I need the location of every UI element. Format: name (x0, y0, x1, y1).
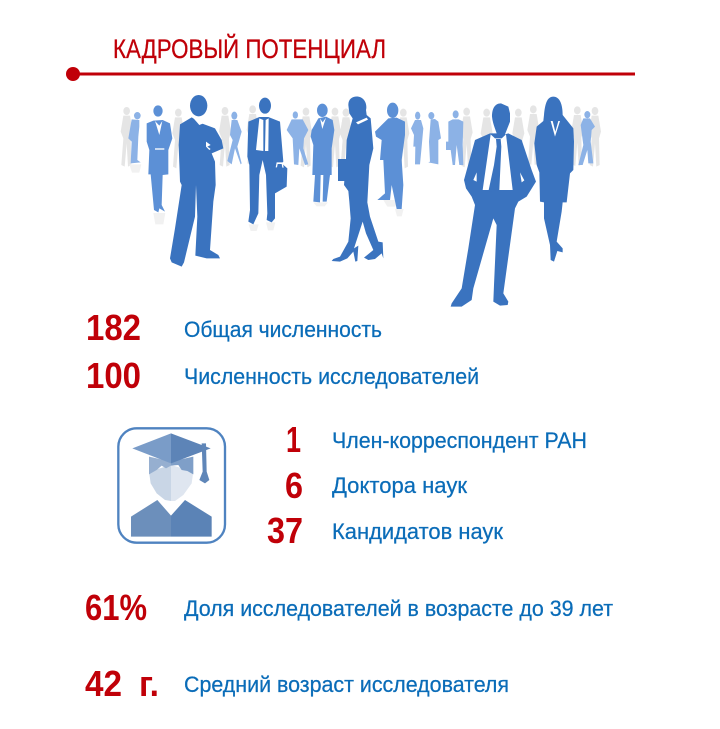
stat: candidates of science: 37 (267, 510, 303, 551)
icon: graduate in cap (118, 428, 225, 543)
stat: researchers (86, 355, 479, 396)
woman in skirt suit, mid-tone (147, 105, 172, 212)
stat: researchers under 39: Доля исследователей в возрасте до 39 лет (184, 596, 613, 621)
stat: doctors of science (285, 465, 467, 506)
stat: corresponding member: Член-корреспондент РАН (332, 428, 587, 453)
illustration: crowd of business people silhouettes (121, 95, 601, 307)
stat: doctors of science: Доктора наук (332, 473, 467, 498)
woman with dark jacket, mid-tone (311, 104, 334, 202)
man with hands in pockets (451, 103, 536, 307)
stat: total staff: 182 (86, 307, 141, 348)
stat: candidates of science (267, 510, 503, 551)
stat: researchers: 100 (86, 355, 141, 396)
faint floor shadows, right (383, 200, 404, 216)
left half of the crowd (121, 95, 352, 267)
title: КАДРОВЫЙ ПОТЕНЦИАЛ (113, 33, 386, 64)
background grey figures, left (121, 105, 352, 168)
man with crossed arms (170, 95, 223, 267)
stat: corresponding member (286, 419, 587, 460)
light back figures, left (128, 111, 308, 165)
stat: researchers under 39 (85, 587, 613, 628)
stat: researchers under 39: 61% (85, 587, 147, 628)
man with crossed arms, mid-tone (375, 103, 405, 209)
woman walking with folder (332, 97, 383, 262)
stat: total staff: Общая численность (184, 317, 382, 342)
stat: doctors of science: 6 (285, 465, 303, 506)
woman with lanyard (534, 97, 574, 262)
light back figures, right (411, 110, 595, 165)
stat: total staff (86, 307, 382, 348)
stat: researchers: Численность исследователей (184, 364, 479, 389)
faint floor shadows (129, 164, 328, 231)
stat: average researcher age: 42 (85, 663, 122, 704)
man with briefcase (247, 98, 287, 224)
stat: corresponding member: 1 (286, 419, 301, 460)
stat: candidates of science: Кандидатов наук (332, 519, 503, 544)
stat: average researcher age (85, 663, 509, 704)
stat: average researcher age: Средний возраст исследователя (184, 672, 509, 697)
stat: average researcher age: г. (139, 663, 159, 704)
title rule with dot (66, 67, 635, 81)
right half of the crowd (332, 97, 601, 307)
background grey figures, right (340, 105, 601, 168)
